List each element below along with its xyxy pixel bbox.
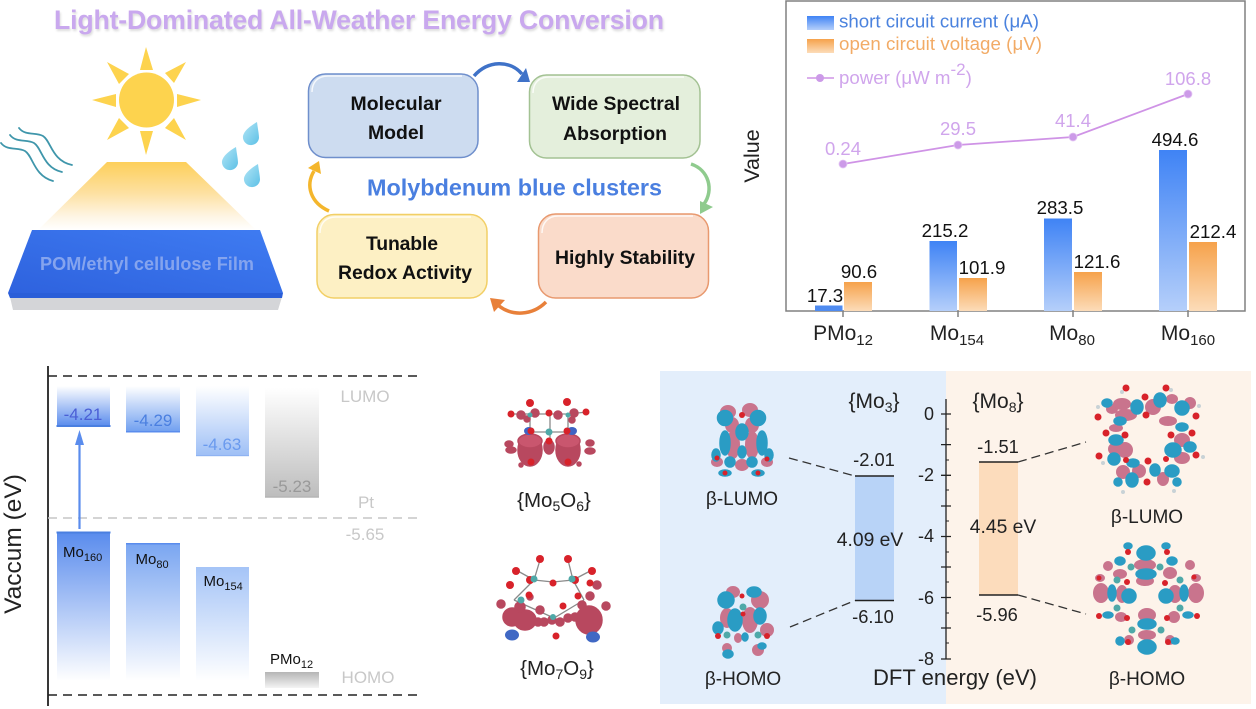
legend: -2 — [950, 60, 966, 79]
HOMO labels: 12 — [301, 659, 313, 671]
power line: 41.4 — [1055, 110, 1091, 131]
molecule: Mo7O9: } — [587, 657, 594, 680]
bar values: 212.4 — [1190, 221, 1236, 242]
bar values: 90.6 — [841, 261, 877, 282]
Mo3 energy levels: 4.09 eV — [837, 530, 903, 551]
bar chart: device performance — [740, 1, 1245, 349]
HOMO labels: Mo — [136, 551, 156, 568]
central label: Molybdenum blue clusters — [367, 174, 662, 200]
HOMO labels: 154 — [224, 581, 243, 593]
DFT energy axis: DFT energy (eV) — [873, 665, 1037, 690]
bar values — [807, 129, 1236, 306]
LUMO values: -4.21 — [64, 405, 102, 424]
panel: molybdenum blue cycle — [308, 64, 713, 313]
orbital: Mo3 LUMO — [706, 404, 778, 510]
x axis labels: Mo — [930, 322, 959, 345]
DFT energy axis: -2 — [918, 465, 934, 485]
x axis labels: PMo — [813, 322, 856, 345]
orbital: Mo8 HOMO — [1094, 543, 1203, 690]
Mo3 energy levels: 3 — [885, 399, 893, 415]
Mo8 energy levels: 4.45 eV — [970, 517, 1036, 538]
Mo3 energy levels — [789, 390, 903, 627]
box: highly stability: Highly Stability — [555, 247, 695, 269]
x axis labels: 160 — [1190, 332, 1215, 349]
molecule: Mo7O9: 9 — [579, 666, 587, 682]
light beam — [38, 162, 256, 230]
orbital: Mo8 LUMO — [1094, 384, 1205, 528]
film label: POM/ethyl cellulose Film — [40, 254, 254, 274]
chart frame — [786, 1, 1245, 311]
LUMO values — [64, 405, 311, 496]
box: wide spectral absorption — [530, 75, 700, 158]
panel: Mo3 background — [660, 371, 946, 704]
box: highly stability — [538, 214, 708, 298]
legend: open circuit voltage (μV) — [839, 33, 1042, 54]
molecule: Mo7O9: {Mo — [520, 657, 555, 680]
icon: sun — [92, 47, 201, 155]
DFT energy axis: 0 — [924, 404, 934, 424]
arrow: green — [691, 164, 713, 214]
axis title: Vaccum (eV) — [0, 474, 27, 614]
Mo8 energy levels: -5.96 — [976, 604, 1018, 625]
Mo8 energy levels: 8 — [1009, 399, 1017, 415]
icon: wind lines — [1, 128, 72, 181]
legend: short circuit current (μA) — [839, 10, 1039, 32]
x axis labels — [813, 311, 1215, 349]
legend: ) — [966, 67, 972, 88]
Mo3 energy levels: } — [892, 390, 900, 413]
film slab — [8, 230, 283, 310]
panel: Mo8 background — [946, 371, 1251, 704]
molecule: Mo5O6: 6 — [576, 498, 584, 514]
LUMO values: -4.29 — [134, 411, 172, 430]
axis title: Value — [740, 129, 764, 183]
box: wide spectral absorption: Wide Spectral — [552, 93, 680, 115]
Mo3 energy levels: {Mo — [848, 390, 885, 413]
orbital: Mo8 LUMO: β-LUMO — [1111, 507, 1183, 528]
molecule: Mo7O9 — [497, 555, 610, 682]
panel: film illustration — [1, 47, 283, 310]
DFT energy axis: -8 — [918, 649, 934, 669]
Mo8 energy levels — [970, 390, 1086, 625]
molecule: Mo5O6: {Mo — [517, 489, 552, 512]
power line: 29.5 — [940, 118, 976, 139]
LUMO values: -4.63 — [203, 435, 241, 454]
molecule: Mo5O6: } — [584, 489, 591, 512]
bar values: 17.3 — [807, 285, 843, 306]
energy level diagram — [0, 366, 417, 706]
legend: power (μW m — [839, 67, 950, 88]
orbital: Mo3 LUMO: β-LUMO — [706, 489, 778, 510]
power line: 106.8 — [1165, 68, 1211, 89]
Mo3 energy levels: -6.10 — [852, 606, 894, 627]
HOMO labels: 80 — [156, 559, 169, 571]
molecule: Mo7O9: 7 — [555, 666, 563, 682]
box: wide spectral absorption: Absorption — [563, 123, 667, 145]
bar values: 494.6 — [1152, 129, 1198, 150]
reference labels: -5.65 — [346, 525, 384, 544]
box: molecular model — [308, 74, 478, 158]
molecule: Mo5O6: 5 — [552, 498, 560, 514]
molecule: Mo5O6: O — [560, 489, 576, 512]
HOMO labels: Mo — [63, 544, 84, 561]
box: tunable redox activity — [317, 214, 487, 298]
DFT energy axis: -6 — [918, 588, 934, 608]
x axis labels: 154 — [959, 332, 984, 349]
Mo8 energy levels: {Mo — [972, 390, 1009, 413]
DFT energy axis — [873, 399, 1037, 690]
icon: water drops — [222, 122, 260, 187]
Mo8 energy levels: } — [1016, 390, 1024, 413]
molecule: Mo7O9: O — [563, 657, 579, 680]
LUMO bars — [56, 386, 319, 498]
orbital: Mo8 HOMO: β-HOMO — [1109, 669, 1185, 690]
power line — [825, 68, 1211, 168]
reference labels: HOMO — [342, 668, 394, 687]
box: tunable redox activity: Tunable — [366, 233, 438, 255]
box: tunable redox activity: Redox Activity — [338, 262, 472, 284]
legend — [807, 10, 1042, 88]
Mo3 energy levels: -2.01 — [853, 449, 895, 470]
reference labels: Pt — [358, 493, 374, 512]
HOMO labels: PMo — [270, 651, 301, 668]
bars — [815, 150, 1217, 311]
DFT energy axis: -4 — [918, 526, 934, 546]
excitation arrow — [75, 430, 84, 529]
bar values: 283.5 — [1037, 197, 1083, 218]
x axis labels: Mo — [1049, 322, 1078, 345]
orbital: Mo3 HOMO — [705, 587, 781, 690]
bar values: 215.2 — [922, 220, 968, 241]
power line: 0.24 — [825, 138, 861, 159]
bar values: 121.6 — [1074, 251, 1120, 272]
title: Light-Dominated All-Weather Energy Conversion — [54, 5, 664, 35]
HOMO bars — [56, 532, 319, 688]
Mo8 energy levels: -1.51 — [977, 436, 1019, 457]
x axis labels: Mo — [1161, 322, 1190, 345]
reference labels: LUMO — [340, 387, 390, 406]
LUMO values: -5.23 — [273, 477, 311, 496]
arrow: yellow — [308, 161, 329, 211]
arrow: orange — [490, 298, 546, 313]
arrow: blue — [474, 64, 530, 82]
HOMO labels: 160 — [84, 552, 102, 564]
reference labels — [340, 387, 394, 687]
x axis labels: 80 — [1078, 332, 1095, 349]
box: molecular model: Molecular — [350, 93, 442, 115]
HOMO labels: Mo — [204, 573, 224, 590]
bar values: 101.9 — [959, 257, 1005, 278]
x axis labels: 12 — [856, 332, 873, 349]
box: molecular model: Model — [368, 122, 424, 144]
orbital: Mo3 HOMO: β-HOMO — [705, 669, 781, 690]
molecule: Mo5O6 — [505, 398, 595, 514]
HOMO labels — [63, 544, 313, 671]
